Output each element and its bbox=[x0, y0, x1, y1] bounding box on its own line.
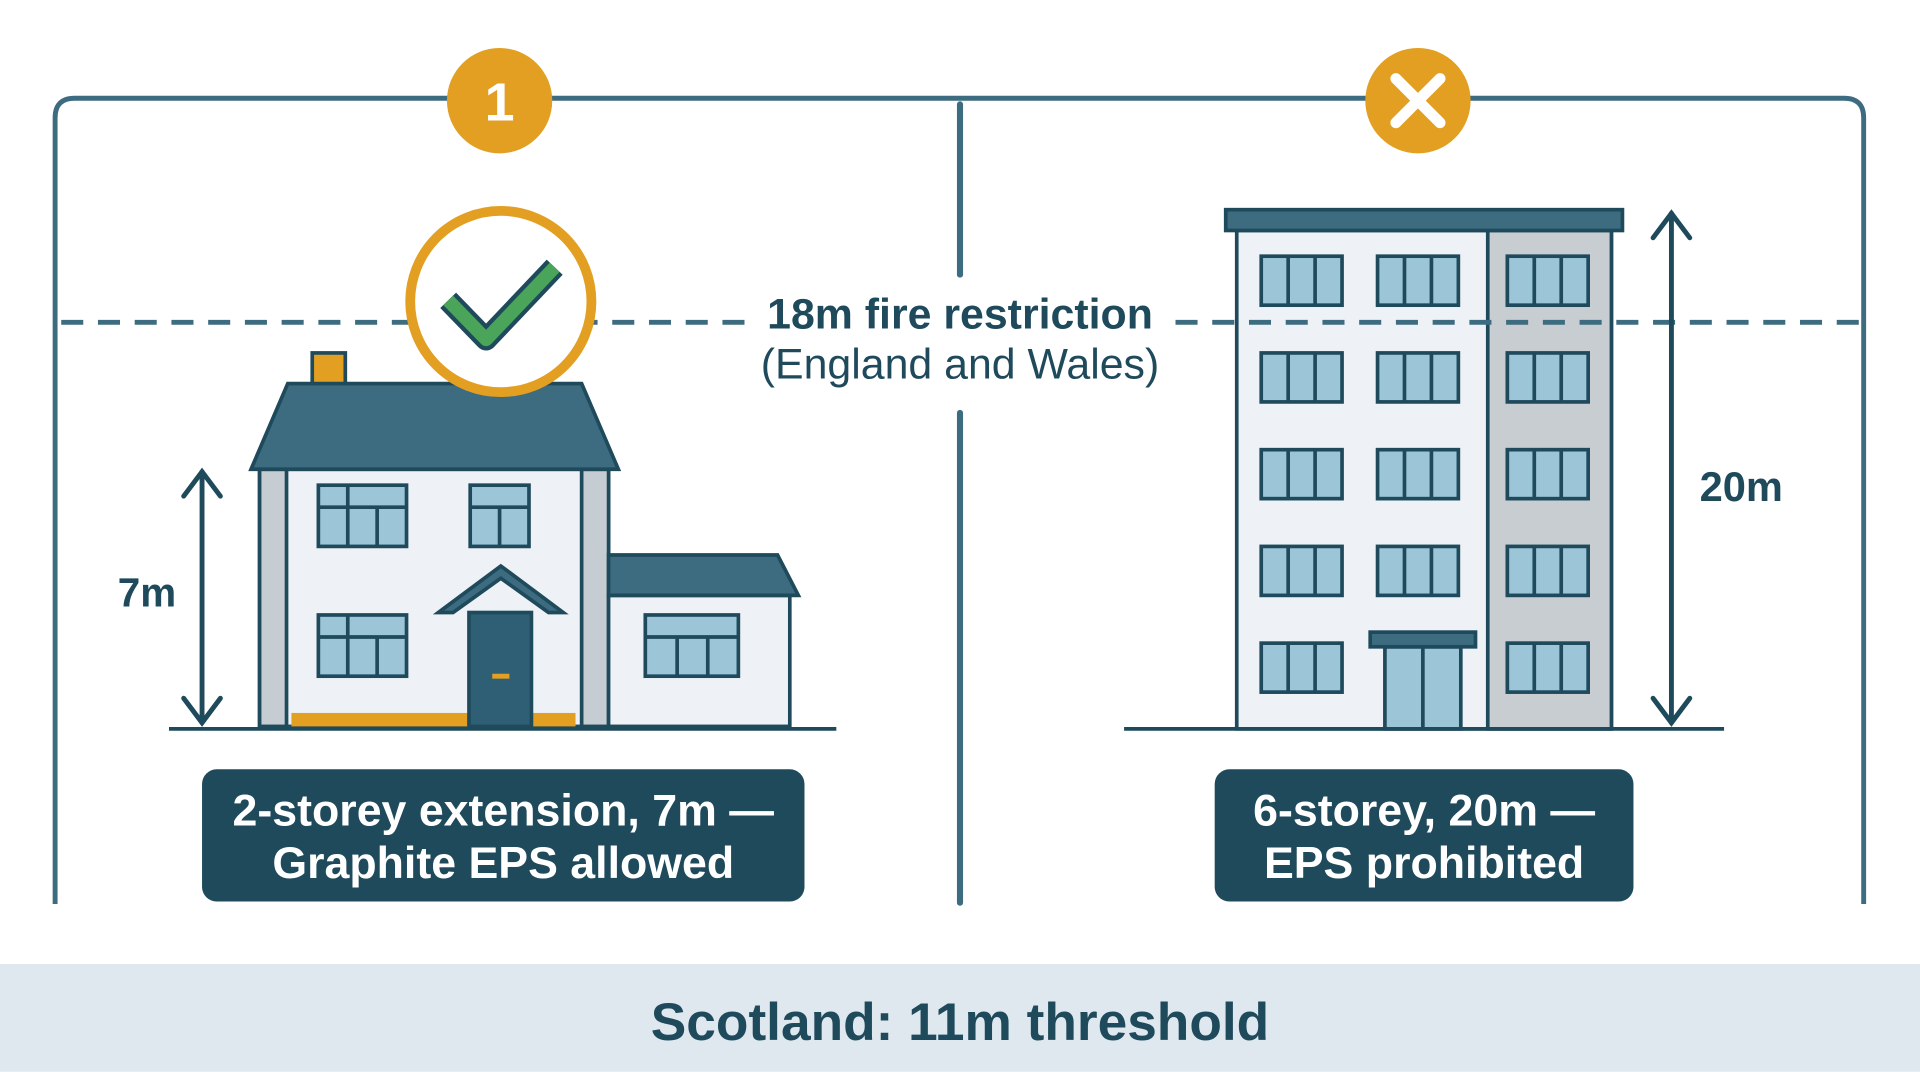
ground right bbox=[1124, 727, 1724, 730]
label box: extension: Graphite EPS allowed bbox=[272, 839, 734, 888]
footer: Scotland bbox=[0, 964, 1920, 1072]
ground left bbox=[169, 727, 836, 730]
badge: 1 bbox=[447, 48, 552, 153]
label box: 6-storey: 6-storey, 20m — bbox=[1253, 787, 1595, 836]
icon: check circle bbox=[410, 211, 591, 392]
dashed 18m line right bbox=[1176, 320, 1861, 324]
center divider bbox=[958, 104, 962, 903]
label box: extension: 2-storey extension, 7m — bbox=[233, 787, 774, 836]
icon: building bbox=[1226, 210, 1622, 729]
frame bbox=[55, 98, 1864, 904]
dashed 18m line left bbox=[61, 320, 747, 324]
label box: 6-storey: EPS prohibited bbox=[1264, 839, 1584, 888]
arrow: 7m bbox=[184, 472, 220, 723]
footer: Scotland: Scotland: 11m threshold bbox=[651, 993, 1269, 1052]
label box: 6-storey bbox=[1215, 769, 1633, 902]
icon: house bbox=[251, 353, 798, 726]
label box: extension bbox=[202, 769, 804, 902]
label 20m: 20m bbox=[1700, 463, 1783, 510]
badge: X bbox=[1365, 48, 1471, 153]
heading: 18m fire restriction: 18m fire restriction bbox=[767, 290, 1153, 338]
arrow: 20m bbox=[1653, 213, 1690, 723]
badge: 1: 1 bbox=[485, 72, 515, 132]
heading: 18m fire restriction: (England and Wales) bbox=[761, 341, 1159, 389]
heading: 18m fire restriction bbox=[761, 290, 1159, 389]
label 7m: 7m bbox=[118, 569, 176, 615]
